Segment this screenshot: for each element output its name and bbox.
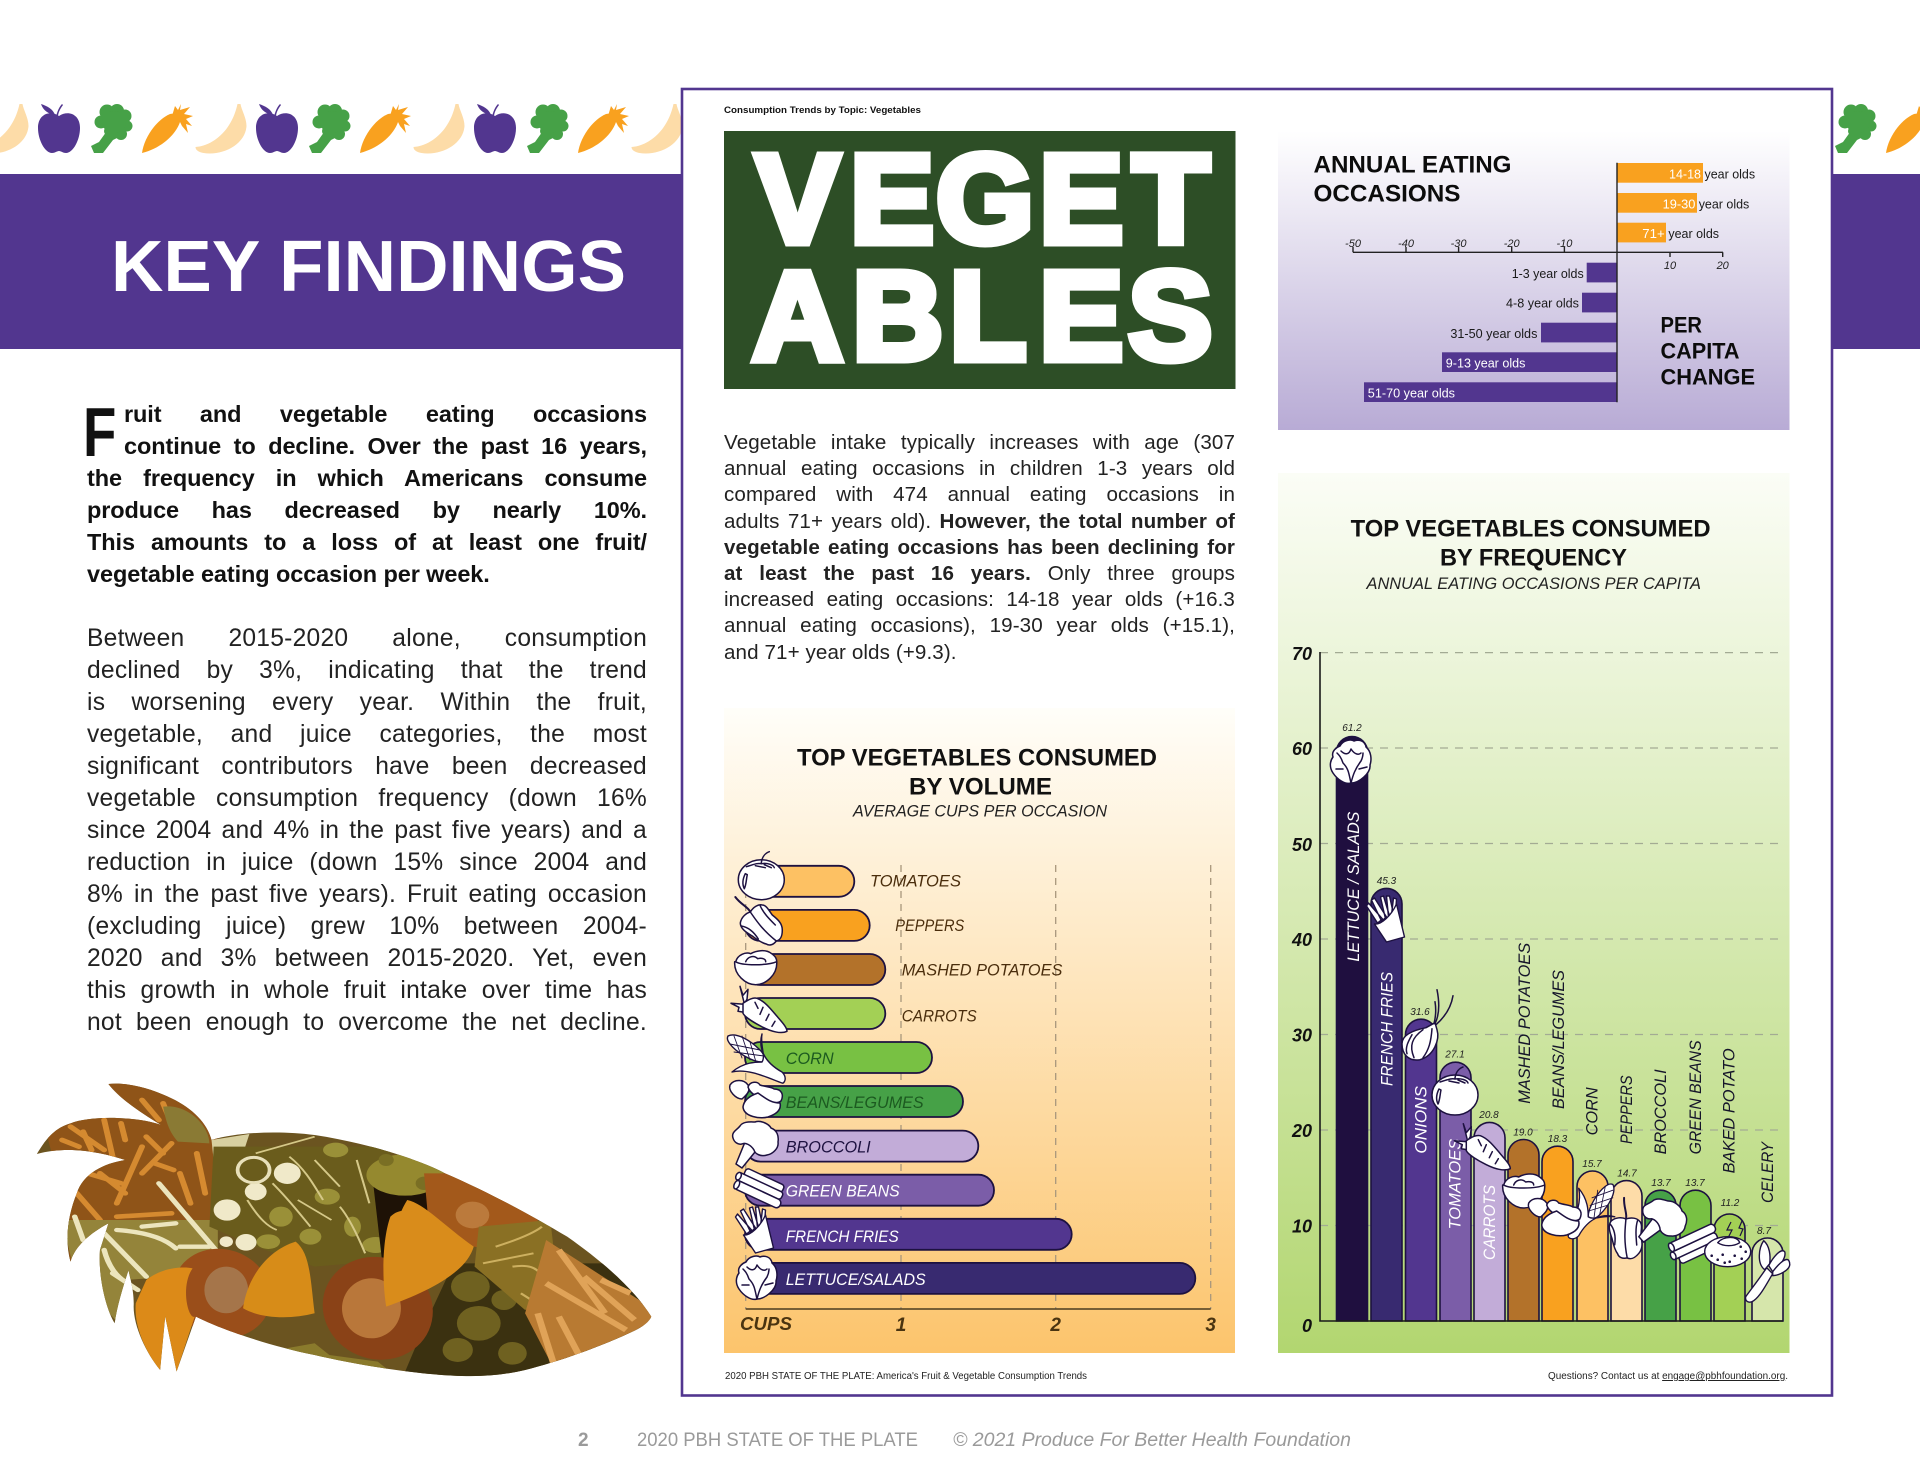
bar labels by volume: CORN — [786, 1050, 834, 1068]
decrease bars — [1364, 263, 1617, 402]
rotated bar labels: PEPPERS — [1617, 1075, 1636, 1144]
drop cap: F — [83, 393, 116, 471]
value labels: 14.7 — [1617, 1168, 1637, 1180]
bar labels by volume — [786, 872, 1062, 1289]
icons for volume bars — [727, 852, 788, 1299]
text block: key finding lead paragraph: continue to decline. Over the past 16 years, — [124, 433, 647, 459]
value labels: 19.0 — [1513, 1128, 1533, 1138]
text block: vegetable intake: Vegetable intake typically increases with age (307 — [724, 431, 1235, 454]
y axis numbers: 60 — [1292, 739, 1312, 759]
steam marks on baked potato bar — [1727, 1221, 1743, 1238]
vegetables title block: ABLES — [752, 245, 1212, 386]
text block: key finding details: not been enough to overcome the net decline. — [87, 1009, 647, 1036]
text block: vegetable intake: adults 71+ years old). However, the total number of — [724, 510, 1235, 533]
subtitle: average cups per occasion: AVERAGE CUPS PER OCCASION — [852, 802, 1108, 820]
bar labels by volume: GREEN BEANS — [786, 1182, 900, 1200]
text block: key finding details: 8% in the past five years). Fruit eating occasion — [87, 881, 647, 908]
value labels: 13.7 — [1651, 1178, 1671, 1189]
text block: key finding lead paragraph: the frequency in which Americans consume — [87, 465, 647, 491]
text block: vegetable intake: increased eating occasions: 14-18 year olds (+16.3 — [724, 588, 1235, 611]
text block: key finding details — [87, 625, 647, 1036]
age group labels: 9-13 year olds — [1446, 355, 1526, 370]
bar labels by volume: LETTUCE/SALADS — [786, 1271, 926, 1289]
y axis numbers: 10 — [1292, 1216, 1312, 1236]
cups axis: 1 — [896, 1315, 906, 1336]
heading: per capita change — [1660, 312, 1755, 389]
text block: key finding details: Between 2015-2020 alone, consumption — [87, 625, 647, 652]
rotated bar labels: LETTUCE / SALADS — [1344, 811, 1363, 962]
heading: by volume — [797, 744, 1157, 800]
value labels: 20.8 — [1478, 1110, 1499, 1121]
text block: key finding lead paragraph: produce has decreased by nearly 10%. — [87, 497, 647, 523]
heading: by frequency — [1351, 516, 1711, 572]
gridlines — [1320, 653, 1780, 1226]
text block: vegetable intake: and 71+ year olds (+9.3). — [724, 641, 957, 664]
axis numbers — [1345, 238, 1730, 272]
text block: key finding lead paragraph: This amounts to a loss of at least one fruit/ — [87, 529, 647, 555]
y axis numbers: 70 — [1292, 644, 1312, 664]
bar labels by volume: FRENCH FRIES — [786, 1228, 899, 1246]
panel: top vegetables consumed by frequency — [1278, 473, 1790, 1353]
text block: key finding lead paragraph: ruit and vegetable eating occasions — [124, 401, 647, 427]
age group labels: 1-3 year olds — [1512, 266, 1584, 281]
heading: key findings: KEY FINDINGS — [111, 227, 626, 307]
text block: key finding details: vegetable, and juice categories, the most — [87, 721, 647, 748]
bars by frequency — [1336, 736, 1783, 1321]
y axis numbers: 0 — [1302, 1316, 1312, 1336]
heading: per capita change: CHANGE — [1660, 364, 1755, 389]
value labels: 45.3 — [1377, 876, 1397, 887]
bar labels by volume: BROCCOLI — [786, 1139, 871, 1157]
value labels: 8.7 — [1757, 1226, 1771, 1237]
rotated bar labels: ONIONS — [1412, 1085, 1431, 1154]
heading: annual eating occasions — [1314, 151, 1512, 208]
fruit and vegetable icon strip — [0, 104, 1920, 153]
rotated bar labels: FRENCH FRIES — [1378, 971, 1396, 1086]
heading: annual eating occasions: ANNUAL EATING — [1314, 151, 1512, 178]
rotated bar labels: MASHED POTATOES — [1515, 942, 1534, 1104]
cups axis: 3 — [1205, 1315, 1216, 1336]
footnote: contact: Questions? Contact us at engage@pbhfoundation.org. — [1548, 1371, 1788, 1382]
bars by volume — [745, 866, 1195, 1294]
text block: key finding details: is worsening every year. Within the fruit, — [87, 689, 647, 716]
text block: vegetable intake: at least the past 16 years. Only three groups — [724, 562, 1235, 585]
value labels: 13.7 — [1685, 1178, 1705, 1189]
text block: key finding details: reduction in juice (down 15% since 2004 and — [87, 849, 647, 876]
purple band behind key findings — [0, 174, 1920, 349]
axis numbers: 10 — [1664, 260, 1677, 272]
age group labels: year olds — [1704, 167, 1756, 182]
text block: vegetable intake: compared with 474 annual eating occasions in — [724, 483, 1235, 506]
heading: by volume: BY VOLUME — [909, 774, 1052, 800]
bar labels by volume: TOMATOES — [870, 872, 961, 890]
age group labels: 31-50 year olds — [1450, 326, 1538, 341]
subtitle: annual eating occasions per capita: ANNUAL EATING OCCASIONS PER CAPITA — [1366, 574, 1701, 593]
age group labels: 19-30 — [1663, 196, 1695, 211]
heading: by frequency: BY FREQUENCY — [1440, 544, 1627, 572]
axes — [1320, 652, 1783, 1321]
text block: key finding details: this growth in whole fruit intake over time has — [87, 977, 647, 1004]
cups axis — [740, 1309, 1216, 1336]
value labels: 27.1 — [1444, 1050, 1465, 1060]
increase bars — [1617, 163, 1703, 242]
heading: by frequency: TOP VEGETABLES CONSUMED — [1351, 516, 1711, 542]
page frame — [682, 89, 1832, 1396]
value labels: 11.2 — [1721, 1198, 1740, 1209]
rotated bar labels — [1344, 811, 1777, 1260]
text block: vegetable intake — [724, 431, 1235, 664]
rotated bar labels: CORN — [1583, 1087, 1602, 1135]
text block: key finding details: significant contributors have been decreased — [87, 753, 647, 780]
text block: key finding details: (excluding juice) grew 10% between 2004- — [87, 913, 647, 940]
age group labels: 71+ — [1642, 226, 1665, 241]
rotated bar labels: BEANS/LEGUMES — [1549, 969, 1568, 1109]
rotated bar labels: CARROTS — [1480, 1184, 1499, 1260]
value labels: 18.3 — [1548, 1134, 1568, 1145]
page footer: 2020 PBH STATE OF THE PLATE — [637, 1430, 918, 1451]
cups axis: 2 — [1049, 1315, 1061, 1336]
text block: key finding details: since 2004 and 4% in the past five years) and a — [87, 817, 647, 844]
panel: top vegetables consumed by volume — [724, 708, 1235, 1353]
axis numbers: -50 — [1345, 238, 1362, 250]
heading: per capita change: PER — [1660, 312, 1702, 337]
bar labels by volume: MASHED POTATOES — [902, 961, 1062, 979]
y axis numbers: 40 — [1291, 930, 1312, 950]
text block: key finding details: declined by 3%, indicating that the trend — [87, 657, 647, 684]
value labels: 61.2 — [1342, 723, 1362, 734]
axis numbers: 20 — [1716, 260, 1730, 272]
axis numbers: -40 — [1398, 238, 1415, 250]
value labels: 31.6 — [1410, 1007, 1430, 1018]
bar labels by volume: PEPPERS — [895, 917, 964, 935]
text block: vegetable intake: vegetable eating occasions has been declining for — [724, 536, 1235, 559]
text block: key finding details: vegetable consumption frequency (down 16% — [87, 785, 647, 812]
axis numbers: -30 — [1451, 238, 1467, 250]
bar labels by volume: CARROTS — [902, 1008, 977, 1026]
age group labels: year olds — [1699, 196, 1750, 211]
age group labels: 51-70 year olds — [1368, 386, 1455, 401]
age group labels: 4-8 year olds — [1506, 296, 1579, 311]
y axis numbers: 20 — [1291, 1121, 1312, 1141]
text block: key finding lead paragraph: vegetable eating occasion per week. — [87, 561, 490, 587]
carrot-shaped vegetable photo — [37, 1084, 652, 1376]
y axis numbers: 50 — [1292, 835, 1312, 855]
gridlines — [746, 865, 1211, 1309]
heading: by volume: TOP VEGETABLES CONSUMED — [797, 744, 1157, 772]
axes — [1353, 163, 1723, 402]
rotated bar labels: BROCCOLI — [1651, 1069, 1670, 1154]
text block: vegetable intake: annual eating occasions), 19-30 year olds (+15.1), — [724, 614, 1235, 637]
vegetables title block: VEGET — [756, 129, 1209, 270]
page footer — [578, 1430, 1351, 1451]
heading: per capita change: CAPITA — [1660, 338, 1740, 363]
value labels — [1342, 723, 1771, 1237]
age group labels: year olds — [1668, 226, 1719, 241]
panel: annual eating occasions per capita change — [1278, 131, 1790, 430]
text block: key finding details: 2020 and 3% between 2015-2020. Yet, even — [87, 945, 647, 972]
value labels: 15.7 — [1582, 1159, 1602, 1170]
icons for frequency bars — [1330, 740, 1790, 1302]
bar labels by volume: BEANS/LEGUMES — [786, 1094, 924, 1112]
heading: annual eating occasions: OCCASIONS — [1314, 181, 1460, 208]
cups axis: CUPS — [740, 1314, 792, 1334]
vegetables title block — [724, 129, 1236, 389]
rotated bar labels: BAKED POTATO — [1720, 1048, 1739, 1173]
y axis numbers — [1291, 644, 1312, 1336]
page footer: © 2021 Produce For Better Health Foundation — [953, 1430, 1351, 1451]
section label: Consumption Trends by Topic: Vegetables — [724, 105, 921, 116]
axis numbers: -10 — [1556, 238, 1573, 250]
page footer: 2 — [578, 1430, 589, 1451]
text block: vegetable intake: annual eating occasions in children 1-3 years old — [724, 457, 1235, 480]
rotated bar labels: TOMATOES — [1446, 1138, 1464, 1230]
text block: key finding lead paragraph — [87, 401, 647, 587]
axis numbers: -20 — [1504, 238, 1521, 250]
footnote: report name: 2020 PBH STATE OF THE PLATE: America's Fruit & Vegetable Consumption Trends — [725, 1371, 1087, 1382]
rotated bar labels: CELERY — [1758, 1141, 1777, 1203]
y axis numbers: 30 — [1292, 1026, 1312, 1046]
rotated bar labels: GREEN BEANS — [1686, 1040, 1705, 1154]
age group labels — [1368, 167, 1756, 401]
age group labels: 14-18 — [1669, 167, 1701, 182]
